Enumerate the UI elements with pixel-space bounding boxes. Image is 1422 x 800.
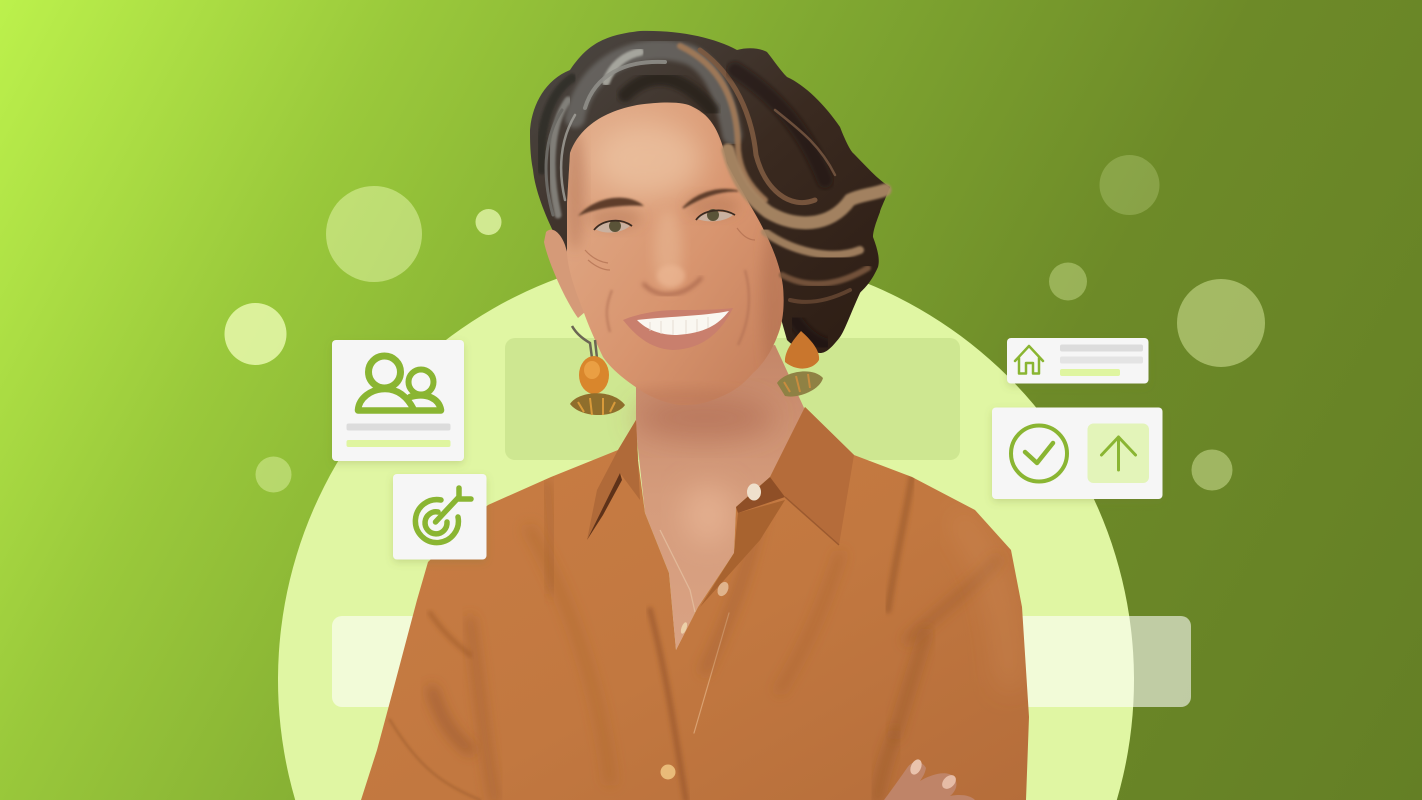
card: home icon: [1007, 338, 1148, 384]
large pale circle: [278, 252, 1134, 800]
neck: [636, 345, 805, 650]
infographic scene: [224, 30, 1265, 800]
ear: [544, 230, 585, 318]
icon: house: [1015, 346, 1043, 374]
orange shirt: [361, 407, 1029, 800]
icon: up arrow tile: [1088, 424, 1149, 483]
icon: target with arrow: [415, 488, 471, 543]
hair strands: [541, 46, 885, 345]
hair back mass: [530, 31, 890, 353]
card: check and upload: [992, 408, 1162, 499]
nose: [643, 277, 702, 294]
decorative translucent circles: [224, 155, 1265, 492]
mouth: [623, 308, 733, 350]
smile lines: [607, 270, 749, 345]
panel: pale rectangle behind portrait: [505, 338, 960, 460]
eyebrows: [578, 190, 738, 216]
hand: [884, 758, 975, 800]
card: target icon: [393, 474, 486, 560]
face: [567, 103, 784, 405]
left eye: [594, 220, 632, 233]
icon: check circle: [1011, 426, 1067, 482]
pendant: [680, 622, 688, 634]
panel: translucent bottom bar: [332, 616, 1191, 707]
icon: two people: [358, 356, 441, 410]
right eye: [696, 209, 735, 221]
shirt buttons: [660, 484, 761, 780]
left earring: [570, 326, 625, 415]
right earring: [777, 331, 823, 397]
left collar: [587, 420, 640, 540]
portrait: woman in orange shirt: [361, 31, 1029, 800]
right collar: [770, 407, 854, 545]
face shading: [565, 122, 789, 412]
shirt folds: [390, 477, 1010, 800]
card: people icon: [332, 340, 464, 461]
